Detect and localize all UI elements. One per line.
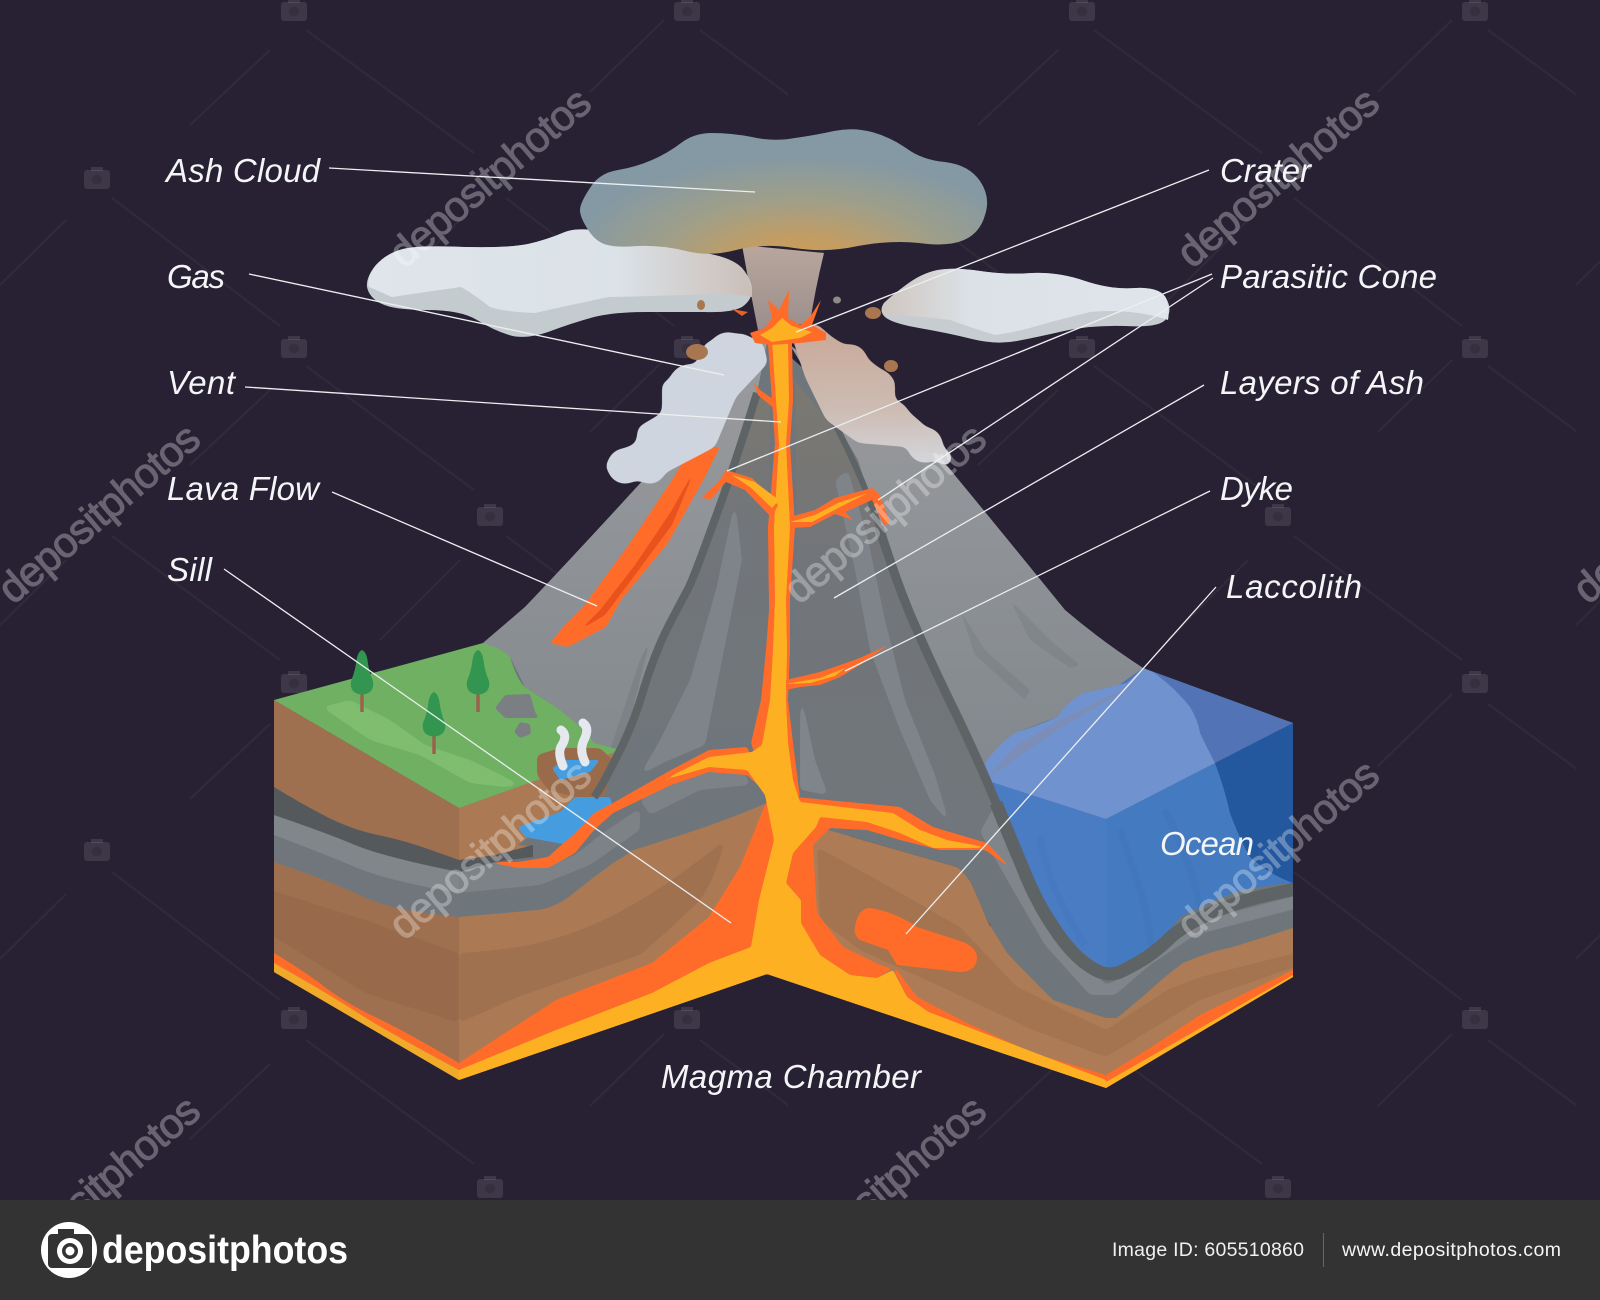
volcano cone	[459, 337, 1310, 1018]
gas cloud left	[367, 229, 752, 337]
label: Gas: Gas	[167, 258, 225, 295]
label: Ocean: Ocean	[1160, 825, 1254, 862]
icon: rocks	[495, 694, 539, 738]
parasitic cones branches	[702, 383, 890, 528]
label: Lava Flow: Lava Flow	[167, 470, 321, 507]
ash column	[742, 245, 824, 330]
ocean	[985, 668, 1293, 970]
lake	[518, 797, 613, 845]
label: Dyke: Dyke	[1220, 470, 1293, 507]
watermarks: depositphotos	[379, 750, 600, 948]
gas plume right of vent	[792, 323, 953, 467]
block underlay	[274, 700, 1293, 1088]
watermarks: depositphotos	[774, 414, 995, 612]
laccolith	[855, 908, 977, 972]
gas plume left of vent	[604, 332, 768, 484]
magma chamber yellow	[459, 950, 1106, 1088]
icon: trees	[351, 650, 489, 754]
label: Ash Cloud: Ash Cloud	[164, 152, 322, 189]
lava flow	[550, 447, 720, 647]
watermarks: depositphotos	[379, 78, 600, 276]
volcanic bombs	[686, 296, 898, 372]
grass plateau with trees	[274, 643, 621, 808]
hot spring with steam	[537, 723, 613, 798]
footer logo: depositphotos	[102, 1229, 348, 1272]
watermarks: depositphotos	[1167, 78, 1388, 276]
dyke	[786, 645, 888, 690]
sill: orange margin	[459, 800, 775, 1070]
label: Crater: Crater	[1220, 152, 1313, 189]
gas cloud right	[882, 269, 1170, 343]
label: Laccolith: Laccolith	[1226, 568, 1362, 605]
label: Parasitic Cone: Parasitic Cone	[1220, 258, 1437, 295]
crater	[750, 290, 826, 445]
right edge magma strip	[1106, 970, 1293, 1082]
label: Sill: Sill	[167, 551, 214, 588]
label: Layers of Ash: Layers of Ash	[1220, 364, 1424, 401]
watermarks: depositphotos	[1167, 750, 1388, 948]
dark ash layer lines	[594, 370, 1300, 974]
footer logo	[41, 1222, 348, 1278]
watermarks: depositphotos	[774, 1086, 995, 1284]
ash cloud	[580, 129, 987, 254]
website: www.depositphotos.com	[1341, 1239, 1561, 1261]
label leader lines	[224, 168, 1216, 934]
magma conduit and chamber	[459, 343, 1293, 1088]
volcano cross-section block	[255, 337, 1315, 1088]
rock layers: right block	[768, 830, 1293, 1088]
label: Magma Chamber: Magma Chamber	[661, 1058, 923, 1095]
rock layers: left block	[255, 700, 775, 1080]
footer bar	[0, 1200, 1600, 1300]
image id: Image ID: 605510860	[1112, 1239, 1304, 1261]
label: Vent: Vent	[167, 364, 237, 401]
